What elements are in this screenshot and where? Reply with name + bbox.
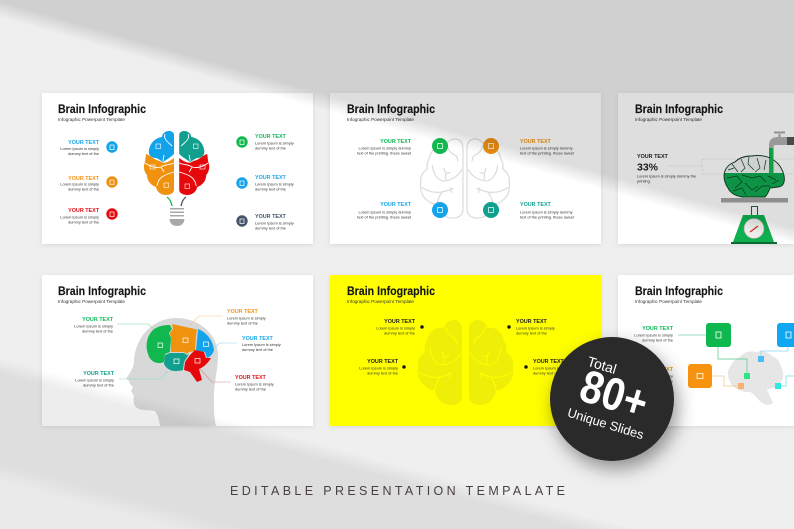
- connector: [669, 159, 794, 174]
- stat 33%: printing.: [637, 178, 651, 184]
- labels: dummy text of the: [642, 378, 673, 384]
- labels: YOUR TEXT: [642, 326, 674, 332]
- scale: [721, 198, 788, 244]
- brain: [724, 156, 784, 197]
- labels: YOUR TEXT: [235, 375, 267, 381]
- title: Brain Infographic: [58, 102, 146, 116]
- labels: Lorem Ipsum is simply: [227, 316, 266, 320]
- labels: YOUR TEXT: [533, 359, 565, 365]
- stat 33%: YOUR TEXT: [637, 154, 669, 160]
- labels: dummy text of the: [533, 370, 564, 376]
- right labels: YOUR TEXT: [255, 134, 287, 140]
- left labels: YOUR TEXT: [68, 140, 100, 146]
- labels: YOUR TEXT: [82, 317, 114, 323]
- dots: [402, 325, 528, 369]
- title: Brain Infographic: [347, 102, 435, 116]
- labels: YOUR TEXT: [642, 367, 674, 373]
- stat 33%: [637, 154, 696, 184]
- right labels: Lorem Ipsum is simply: [255, 140, 294, 146]
- labels: Lorem Ipsum is simply: [235, 382, 274, 386]
- slide: flow brain: [618, 275, 794, 426]
- subtitle: Infographic Powerpoint Template: [58, 117, 125, 122]
- labels: Lorem Ipsum is simply: [376, 326, 415, 330]
- slide: brain on scale: [618, 93, 794, 244]
- brain outline: [421, 139, 509, 218]
- right labels: dummy text of the: [255, 146, 286, 150]
- labels: YOUR TEXT: [83, 371, 115, 377]
- left labels: YOUR TEXT: [68, 176, 100, 182]
- labels: YOUR TEXT: [520, 202, 552, 208]
- icon circles: [106, 136, 248, 227]
- stat 33%: Lorem Ipsum is simply dummy the: [637, 174, 696, 178]
- labels: YOUR TEXT: [242, 336, 274, 342]
- title: Brain Infographic: [58, 284, 146, 298]
- labels: Lorem Ipsum is simply: [634, 332, 673, 338]
- slide: outline brain: [330, 93, 601, 244]
- subtitle: Infographic Powerpoint Template: [347, 117, 414, 122]
- icon circles: [432, 138, 499, 218]
- labels: dummy text of the: [83, 382, 114, 388]
- labels: Lorem Ipsum is simply: [516, 326, 555, 330]
- yellow brain: [418, 320, 513, 405]
- labels: YOUR TEXT: [380, 139, 412, 145]
- labels: text of the printing. these sweet: [357, 150, 412, 156]
- labels: dummy text of the: [384, 330, 415, 336]
- right labels: Lorem Ipsum is simply: [255, 220, 294, 226]
- left labels: dummy text of the: [68, 186, 99, 192]
- subtitle: Infographic Powerpoint Template: [347, 299, 414, 304]
- labels: Lorem Ipsum is simply: [242, 342, 281, 347]
- subtitle: Infographic Powerpoint Template: [635, 117, 702, 122]
- labels: dummy text of the: [516, 330, 547, 336]
- right labels: YOUR TEXT: [255, 214, 287, 220]
- labels: [74, 309, 281, 392]
- labels: Lorem Ipsum is simply: [75, 378, 114, 382]
- labels: YOUR TEXT: [520, 139, 552, 145]
- puzzle brain: [147, 324, 214, 382]
- left labels: Lorem Ipsum is simply: [60, 146, 99, 151]
- title: Brain Infographic: [635, 284, 723, 298]
- labels: Lorem Ipsum is simply dummy: [520, 210, 573, 214]
- labels: text of the printing. these sweet: [357, 214, 412, 220]
- right labels: dummy text of the: [255, 186, 286, 192]
- slide: head brain: [42, 275, 313, 426]
- labels: dummy text of the: [235, 386, 266, 392]
- left labels: dummy text of the: [68, 220, 99, 224]
- left labels: Lorem Ipsum is simply: [60, 214, 99, 220]
- right labels: dummy text of the: [255, 226, 286, 230]
- labels: Lorem Ipsum is simply: [533, 366, 572, 370]
- labels: YOUR TEXT: [227, 309, 259, 315]
- left labels: [60, 140, 100, 224]
- labels: Lorem Ipsum is simply dummy: [358, 210, 411, 214]
- right labels: YOUR TEXT: [255, 175, 287, 181]
- footer caption: EDITABLE PRESENTATION TEMPALATE: [230, 484, 565, 498]
- labels: dummy text of the: [82, 328, 113, 334]
- 80+: 80+: [574, 359, 654, 429]
- left labels: YOUR TEXT: [68, 208, 100, 214]
- total: Total: [586, 353, 618, 377]
- right labels: Lorem Ipsum is simply: [255, 182, 294, 186]
- head silhouette: [126, 318, 218, 426]
- subtitle: Infographic Powerpoint Template: [58, 299, 125, 304]
- title: Brain Infographic: [347, 284, 435, 298]
- unique slides: Unique Slides: [566, 405, 646, 442]
- title: Brain Infographic: [635, 102, 723, 116]
- brain bulb: [144, 131, 209, 226]
- tap: [769, 132, 794, 175]
- badge: 80+ unique slides: [550, 337, 674, 461]
- right labels: [255, 134, 294, 230]
- connector lines: [678, 335, 794, 386]
- labels: dummy text of the: [642, 338, 673, 342]
- labels: [634, 326, 674, 384]
- labels: text of the printing. these sweet: [520, 214, 575, 220]
- labels: Lorem Ipsum is simply: [74, 324, 113, 328]
- labels: [359, 319, 572, 376]
- boxes: [688, 323, 794, 389]
- labels: YOUR TEXT: [384, 319, 416, 325]
- stat 33%: 33%: [637, 162, 659, 174]
- left labels: dummy text of the: [68, 151, 99, 156]
- slide: bulb brain: [42, 93, 313, 244]
- leader lines: [117, 316, 237, 382]
- labels: Lorem Ipsum is simply: [634, 374, 673, 378]
- subtitle: Infographic Powerpoint Template: [635, 299, 702, 304]
- labels: Lorem Ipsum is simply: [359, 366, 398, 370]
- slide: yellow brain: [330, 275, 601, 426]
- labels: dummy text of the: [242, 347, 273, 352]
- labels: Lorem Ipsum is simply dummy: [520, 146, 573, 150]
- gray brain: [728, 351, 783, 405]
- left labels: Lorem Ipsum is simply: [60, 182, 99, 186]
- labels: dummy text of the: [367, 370, 398, 376]
- labels: YOUR TEXT: [516, 319, 548, 325]
- labels: YOUR TEXT: [380, 202, 412, 208]
- labels: [357, 139, 575, 220]
- labels: Lorem Ipsum is simply dummy: [358, 146, 411, 150]
- labels: YOUR TEXT: [367, 359, 399, 365]
- labels: text of the printing. these sweet: [520, 150, 575, 156]
- labels: dummy text of the: [227, 320, 258, 326]
